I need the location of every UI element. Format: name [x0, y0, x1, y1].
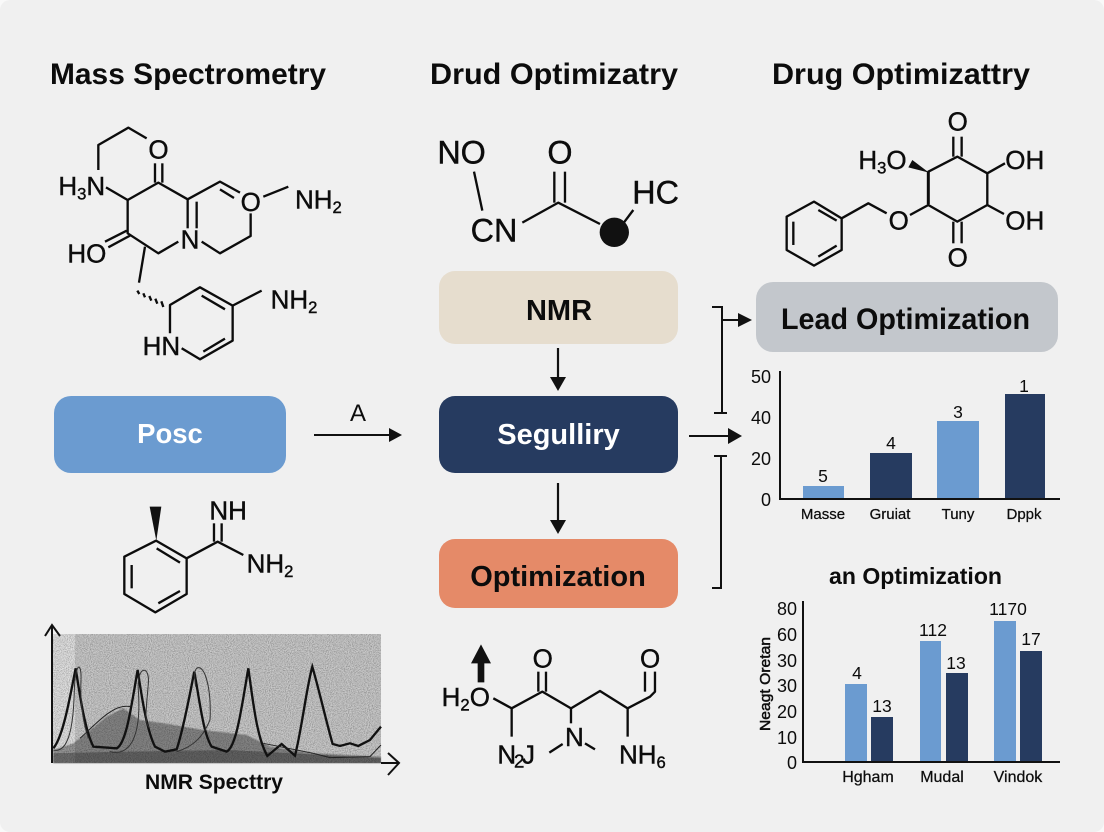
node: Segulliry — [439, 396, 678, 473]
bar chart: bottom: 17 — [1021, 629, 1041, 649]
node: Optimization — [439, 539, 678, 608]
bar chart: bottom: 60 — [777, 625, 797, 645]
molecule: benzyl quinone: OH — [1005, 205, 1044, 235]
node: Posc: Posc — [137, 418, 203, 449]
molecule: fused ring structure: HN — [143, 331, 180, 361]
arrow: Segulliry to Optimization — [550, 483, 566, 534]
bar chart: bottom: 13 — [872, 696, 892, 716]
bar chart: bottom: 80 — [777, 599, 797, 619]
molecule: amino chain: O — [640, 644, 660, 674]
bar chart: bottom: Mudal — [920, 769, 964, 786]
arrow: A — [314, 400, 402, 442]
molecule: fused ring structure: NH — [295, 184, 333, 214]
molecule: benzyl quinone: O — [948, 107, 968, 137]
molecule: amino chain: O — [470, 682, 490, 712]
molecule: fused ring structure: 2 — [308, 298, 317, 317]
molecule: NO CN HC: HC — [632, 174, 679, 210]
bar chart: top — [751, 367, 1060, 523]
molecule: fused ring structure — [58, 128, 342, 361]
molecule: amino chain: N — [565, 722, 584, 752]
bar chart: top: 5 — [818, 466, 828, 486]
node: Lead Optimization — [756, 282, 1058, 352]
bar chart: top: 3 — [953, 402, 963, 422]
heading: Drud Optimizatry: Drud Optimizatry — [430, 58, 678, 91]
bar chart: top: Masse — [801, 506, 845, 523]
molecule: amino chain: 2 — [460, 696, 470, 715]
molecule: NO CN HC: NO — [437, 134, 486, 170]
molecule: fused ring structure: O — [241, 187, 261, 217]
molecule: benzyl quinone: H — [858, 145, 877, 175]
chart: NMR spectrum — [45, 625, 399, 775]
bar chart: top: 20 — [751, 449, 771, 469]
arrow: NMR to Segulliry — [550, 348, 566, 391]
molecule: NO CN HC — [437, 134, 679, 249]
bar chart: top: Dppk — [1006, 506, 1042, 523]
molecule: benzene amidine: NH — [247, 548, 284, 578]
bar chart: bottom: 30 — [777, 676, 797, 696]
molecule: benzyl quinone: OH — [1005, 145, 1044, 175]
bar chart: top: 1 — [1019, 376, 1029, 396]
molecule: benzyl quinone: O — [886, 145, 907, 175]
molecule: NO CN HC: CN — [471, 213, 517, 249]
molecule: NO CN HC: O — [547, 134, 572, 170]
bar chart: bottom: 30 — [777, 651, 797, 671]
molecule: fused ring structure: NH — [271, 284, 308, 314]
molecule: amino chain: H — [442, 682, 460, 712]
bar chart: bottom: 10 — [777, 728, 797, 748]
molecule: amino chain — [442, 644, 666, 772]
node: NMR — [439, 271, 678, 344]
bar chart: top: 50 — [751, 367, 771, 387]
bar chart: top: 40 — [751, 408, 771, 428]
molecule: fused ring structure: N — [86, 171, 105, 201]
molecule: fused ring structure: H — [58, 171, 77, 201]
bar chart: bottom: 1170 — [989, 599, 1027, 619]
node: Optimization: Optimization — [470, 561, 646, 593]
molecule: benzene amidine: 2 — [284, 562, 293, 581]
bar chart: bottom: Vindok — [994, 769, 1043, 786]
node: NMR: NMR — [526, 295, 592, 327]
bar chart: top: Gruiat — [870, 506, 911, 523]
connector: lower bracket — [712, 456, 727, 588]
bar chart: bottom: Hgham — [842, 769, 894, 786]
heading: Drug Optimizattry: Drug Optimizattry — [772, 58, 1030, 91]
molecule: benzene amidine — [124, 495, 293, 612]
molecule: amino chain: 6 — [657, 753, 666, 772]
molecule: fused ring structure: 3 — [77, 185, 86, 204]
bar chart: bottom: 112 — [919, 620, 947, 640]
bar chart: top: Tuny — [942, 506, 975, 523]
heading: an Optimization: an Optimization — [829, 563, 1002, 589]
bar chart: bottom — [757, 599, 1060, 786]
molecule: fused ring structure: HO — [67, 239, 106, 269]
arrow: A: A — [350, 400, 366, 427]
molecule: fused ring structure: N — [181, 224, 199, 254]
molecule: amino chain: O — [533, 644, 553, 674]
node: Segulliry: Segulliry — [497, 419, 620, 451]
molecule: benzyl quinone: 3 — [877, 159, 886, 178]
molecule: amino chain: NH — [619, 739, 657, 769]
molecule: fused ring structure: 2 — [333, 198, 342, 217]
molecule: benzyl quinone: O — [889, 205, 909, 235]
bar chart: bottom: 0 — [787, 753, 797, 773]
caption: NMR Specttry: NMR Specttry — [145, 771, 283, 794]
molecule: benzyl quinone: O — [948, 243, 968, 273]
bar chart: bottom: 20 — [777, 702, 797, 722]
node: Lead Optimization: Lead Optimization — [781, 303, 1030, 336]
molecule: benzyl quinone — [787, 107, 1044, 273]
molecule: amino chain: 2 — [514, 751, 524, 772]
molecule: amino chain: J — [522, 739, 535, 769]
bar chart: top: 0 — [761, 490, 771, 510]
molecule: fused ring structure: O — [148, 134, 169, 164]
bar chart: bottom: 13 — [946, 653, 966, 673]
node: Posc — [54, 396, 286, 473]
molecule: benzene amidine: NH — [209, 495, 247, 525]
arrow: Segulliry to bar chart — [689, 428, 742, 444]
bar chart: bottom: 4 — [852, 663, 862, 683]
connector: upper bracket with arrow to Lead Optimization — [712, 307, 752, 413]
bar chart: top: 4 — [886, 433, 896, 453]
molecule: amino chain: N — [497, 739, 516, 769]
bar chart: bottom: Neagt Oretan — [757, 637, 774, 731]
heading: Mass Spectrometry: Mass Spectrometry — [50, 58, 326, 91]
